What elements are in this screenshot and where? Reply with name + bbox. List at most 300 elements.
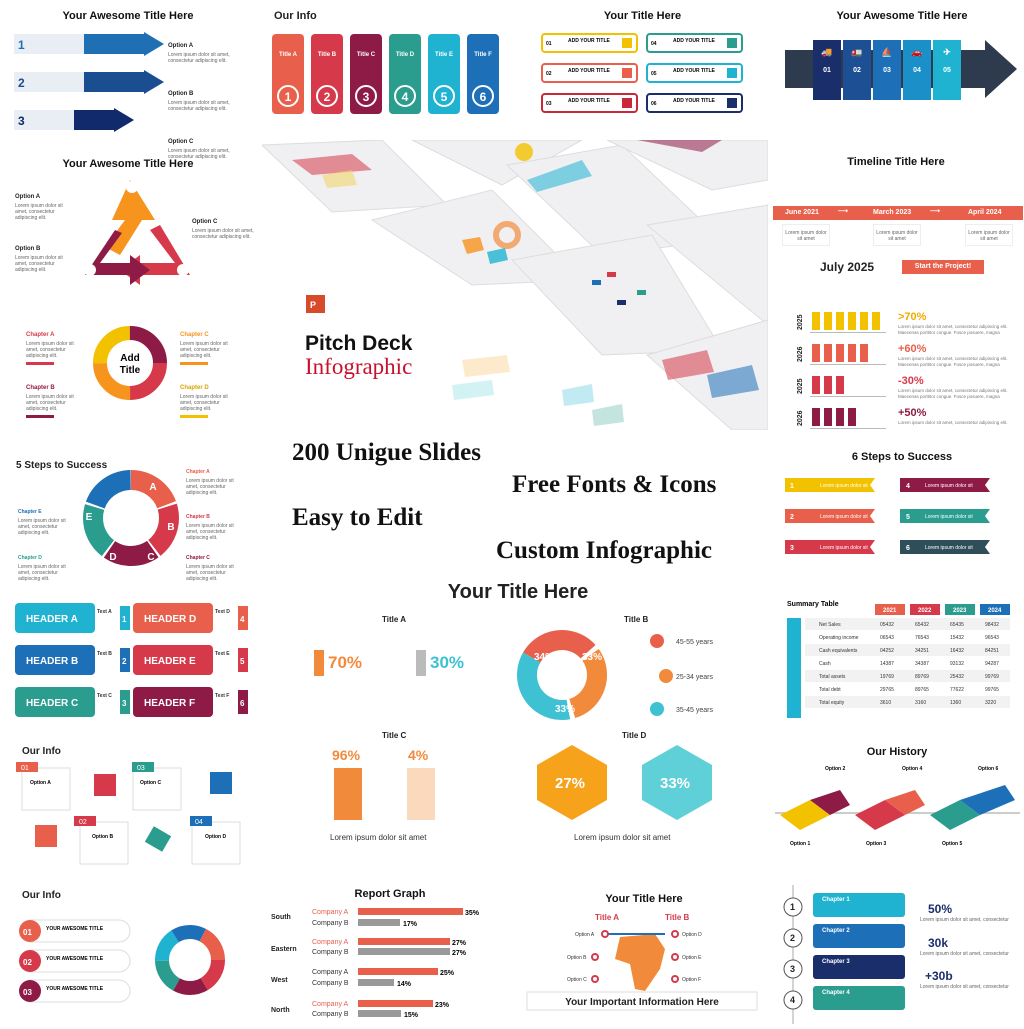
panel: map: Option C [567, 977, 587, 983]
panel: headers: 1 [122, 615, 127, 624]
panel: people chart: Lorem ipsum dolor sit amet, consectetur adipiscing elit. [898, 420, 1008, 425]
big arrow: 03 [883, 67, 891, 74]
panel: 5 steps: Lorem ipsum dolor sit amet, consectetur adipiscing elit. [18, 518, 66, 536]
panel: summary table: 99765 [985, 687, 999, 693]
panel: chapters: Lorem ipsum dolor sit amet, consectetur [920, 917, 1009, 923]
panel: summary table: 25432 [950, 674, 964, 680]
panel: summary table: 76543 [915, 635, 929, 641]
panel: map: Option D [682, 932, 702, 938]
panel: timeline: Lorem ipsum dolor sit amet [876, 230, 918, 242]
panel: headers: HEADER F [144, 698, 195, 709]
panel: chapters: 1 [790, 902, 795, 912]
panel: central title here: 35-45 years [676, 707, 713, 714]
panel: summary table: 34387 [915, 661, 929, 667]
panel: map: Option F [682, 977, 701, 983]
panel: report graph: 15% [404, 1012, 419, 1019]
timeline cards [782, 224, 830, 246]
ribbons: 3 [790, 545, 794, 552]
heading: Your Title Here [605, 893, 683, 905]
panel: summary table: 05432 [880, 622, 894, 628]
panel: add title donut: Lorem ipsum dolor sit amet, consectetur adipiscing elit. [180, 394, 228, 412]
timeline cards: Lorem ipsum dolor sit amet [785, 230, 827, 242]
ring: C [147, 552, 155, 563]
panel: headers: 6 [240, 699, 245, 708]
panel: map: Your Important Information Here [565, 997, 719, 1008]
panel: summary table: 2021 [883, 608, 897, 614]
panel: our history: Option 6 [978, 766, 998, 772]
panel: headers: HEADER E [144, 656, 196, 667]
panel: 5 steps: Lorem ipsum dolor sit amet, consectetur adipiscing elit. [186, 564, 234, 582]
arrow 2: 2 [18, 76, 25, 90]
boxes: ADD YOUR TITLE [673, 68, 716, 74]
ribbons: Lorem ipsum dolor sit [925, 514, 973, 520]
ribbons: Lorem ipsum dolor sit [820, 483, 868, 489]
ribbons: Lorem ipsum dolor sit [925, 545, 973, 551]
chapters: Lorem ipsum dolor sit amet, consectetur adipiscing elit. [26, 341, 74, 359]
panel: chapters: 50% [928, 902, 952, 916]
panel: transport arrow [785, 10, 1017, 100]
panel: our info steps [19, 890, 225, 1002]
columns: 1 [285, 90, 292, 104]
options text: Option C [168, 139, 193, 145]
panel: our history [775, 746, 1020, 847]
boxes: 02 [546, 71, 552, 77]
panel: our info boxes: 04 [195, 819, 203, 826]
panel: headers: Text A [97, 609, 112, 615]
heading: 5 Steps to Success [16, 460, 107, 471]
panel: add title donut: Chapter B [26, 385, 55, 391]
panel: chapters [784, 885, 1009, 1024]
slide mockups: P [310, 300, 316, 310]
panel: add title donut: Chapter D [180, 385, 209, 391]
panel: central title here: 33% [555, 704, 575, 715]
panel: people chart: 2026 [797, 346, 804, 362]
panel: our info boxes: Option C [140, 780, 161, 786]
arrow 2 [14, 70, 164, 94]
panel: report graph: Company A [312, 1001, 349, 1008]
panel: summary table: 84251 [985, 648, 999, 654]
columns: Title D [396, 52, 415, 58]
panel: summary table: 06543 [880, 635, 894, 641]
panel: chapters: Lorem ipsum dolor sit amet, consectetur [920, 984, 1009, 990]
panel: our info boxes: Option D [205, 834, 226, 840]
panel: map: Option B [567, 955, 587, 961]
columns: 3 [363, 90, 370, 104]
panel: summary table: 94287 [985, 661, 999, 667]
ring: E [86, 512, 93, 523]
big arrow: 05 [943, 67, 951, 74]
columns: Title C [357, 52, 376, 58]
options text: Lorem ipsum dolor sit amet, consectetur adipiscing elit. [168, 52, 230, 64]
panel: 6 steps [785, 451, 990, 554]
labels: Lorem ipsum dolor sit amet, consectetur adipiscing elit. [186, 478, 234, 496]
options text: Lorem ipsum dolor sit amet, consectetur adipiscing elit. [168, 148, 230, 160]
ring: B [167, 522, 175, 533]
columns: 4 [402, 90, 409, 104]
options [15, 194, 63, 221]
panel: timeline: April 2024 [968, 209, 1001, 216]
panel: summary table: 1360 [950, 700, 961, 706]
ribbons [785, 478, 990, 554]
big arrow: ⛵ [881, 46, 893, 57]
big arrow: 🚗 [911, 47, 923, 57]
hero title: Pitch Deck [305, 332, 412, 355]
panel: summary table: 98432 [985, 622, 999, 628]
panel: our info steps: YOUR AWESOME TITLE [46, 956, 104, 962]
panel: report graph: Company B [312, 980, 349, 987]
chapters [26, 332, 74, 365]
panel: report graph: North [271, 1007, 290, 1014]
panel: central title here: 25-34 years [676, 674, 713, 681]
panel: people chart: +50% [898, 407, 927, 419]
panel: summary table: 15432 [950, 635, 964, 641]
panel: our info steps: 02 [23, 958, 32, 967]
boxes: ADD YOUR TITLE [568, 98, 611, 104]
options text: Lorem ipsum dolor sit amet, consectetur adipiscing elit. [168, 100, 230, 112]
panel: 5 steps: Chapter E [18, 509, 42, 515]
columns [272, 34, 499, 114]
columns: Title E [435, 52, 453, 58]
panel: our info boxes: Option A [30, 780, 51, 786]
heading: Your Awesome Title Here [62, 10, 194, 22]
panel: summary table: Net Sales [819, 622, 841, 628]
july: July 2025 [820, 260, 874, 274]
ring [83, 470, 179, 566]
panel: central title here: 45-55 years [676, 639, 713, 646]
panel: headers: HEADER B [26, 656, 78, 667]
panel: timeline: March 2023 [873, 209, 911, 216]
panel: central title here: Title D [622, 731, 647, 740]
panel: chapters: Chapter 2 [822, 928, 850, 934]
panel: report graph: 23% [435, 1002, 450, 1009]
big arrow: 🚚 [821, 47, 833, 57]
panel: our info boxes: Option B [92, 834, 113, 840]
panel: our info boxes [16, 746, 240, 864]
panel: report graph: Company B [312, 949, 349, 956]
panel: summary table: Total debt [819, 687, 841, 693]
boxes: 06 [651, 101, 657, 107]
panel: report graph: Company B [312, 920, 349, 927]
options: Option A [15, 194, 40, 200]
panel: central title here: Lorem ipsum dolor sit amet [330, 833, 427, 842]
panel: chapters: 3 [790, 964, 795, 974]
panel: our info steps: 03 [23, 988, 32, 997]
arrow 3: 3 [18, 114, 25, 128]
panel: map [526, 893, 758, 1010]
panel: our info steps: 01 [23, 928, 32, 937]
panel: our info boxes: 01 [21, 765, 29, 772]
ribbons: 4 [906, 483, 910, 490]
panel: summary table: 2022 [918, 608, 932, 614]
arrow 1: 1 [18, 38, 25, 52]
panel: chapters: 2 [790, 933, 795, 943]
panel: cycle triangle [15, 158, 254, 285]
panel: headers: HEADER C [26, 698, 78, 709]
big arrow: 🚛 [851, 47, 863, 57]
panel: headers: Text B [97, 651, 112, 657]
panel: report graph [271, 888, 480, 1019]
panel: 5 steps: Chapter D [18, 555, 42, 561]
panel: central title here: Title B [624, 615, 649, 624]
panel: chapters: 4 [790, 995, 795, 1005]
panel: cycle triangle: Lorem ipsum dolor sit amet, consectetur adipiscing elit. [192, 228, 254, 240]
panel: 5 steps: Lorem ipsum dolor sit amet, consectetur adipiscing elit. [186, 523, 234, 541]
ring: A [149, 482, 157, 493]
ribbons: 5 [906, 514, 910, 521]
panel: people chart: Lorem ipsum dolor sit amet, consectetur adipiscing elit. [898, 356, 1008, 361]
panel: summary table: Total assets [819, 674, 846, 680]
boxes: ADD YOUR TITLE [568, 68, 611, 74]
panel: headers: 4 [240, 615, 245, 624]
big arrow: 02 [853, 67, 861, 74]
panel: 5 steps: Lorem ipsum dolor sit amet, consectetur adipiscing elit. [18, 564, 66, 582]
panel: people chart [797, 311, 1008, 429]
panel: summary table: Cash equivalents [819, 648, 858, 654]
panel: headers: Text C [97, 693, 112, 699]
big arrow: ✈ [943, 47, 951, 57]
panel: our info boxes: 02 [79, 819, 87, 826]
panel: summary table: 93132 [950, 661, 964, 667]
panel: people chart: -30% [898, 375, 924, 387]
panel: headers: Text D [215, 609, 230, 615]
panel: summary table: 04252 [880, 648, 894, 654]
panel: chapters: Chapter 1 [822, 897, 850, 903]
panel: people chart: 2025 [797, 378, 804, 394]
panel: our info boxes: 03 [137, 765, 145, 772]
columns: 6 [480, 90, 487, 104]
options: Lorem ipsum dolor sit amet, consectetur adipiscing elit. [15, 203, 63, 221]
panel: summary table: Total equity [819, 700, 845, 706]
ribbons: 2 [790, 514, 794, 521]
text block: features: 200 Unigue Slides [292, 439, 481, 466]
panel: map: Option E [682, 955, 702, 961]
panel: people chart: Lorem ipsum dolor sit amet, consectetur adipiscing elit. [898, 324, 1008, 329]
panel: report graph: Company A [312, 909, 349, 916]
panel: summary table: 99769 [985, 674, 999, 680]
panel: chapters: Chapter 4 [822, 990, 850, 996]
panel: chapters: 30k [928, 936, 948, 950]
panel: headers: 3 [122, 699, 127, 708]
panel: people chart: >70% [898, 311, 927, 323]
panel: summary table: 77622 [950, 687, 964, 693]
options text: Option B [168, 91, 193, 97]
panel: people chart: 2026 [797, 410, 804, 426]
panel: central title here: 33% [582, 652, 602, 663]
panel: 5 steps: Chapter C [186, 555, 210, 561]
panel: central title here: 4% [408, 747, 429, 763]
panel: central title here: 33% [660, 775, 690, 792]
panel: add title donut: Chapter C [180, 332, 209, 338]
panel: people chart: Maecenas porttitor congue. Fusce posuere, magna [898, 362, 1000, 367]
panel: summary table: 3160 [915, 700, 926, 706]
panel: summary table: 89769 [915, 674, 929, 680]
panel: summary table: 14387 [880, 661, 894, 667]
panel: timeline: Start the Project! [915, 263, 971, 270]
panel: report graph: 27% [452, 950, 467, 957]
heading: Timeline Title Here [847, 156, 945, 168]
columns: Title A [279, 52, 298, 58]
panel: headers: 2 [122, 657, 127, 666]
panel: headers: Text E [215, 651, 230, 657]
panel: summary table: 2024 [988, 608, 1002, 614]
panel: title boxes list [541, 10, 743, 113]
text block: features: Free Fonts & Icons [512, 471, 716, 498]
panel: cycle triangle: Lorem ipsum dolor sit amet, consectetur adipiscing elit. [15, 255, 63, 273]
panel: central title here [314, 581, 713, 842]
panel: report graph: South [271, 914, 291, 921]
big arrow [785, 40, 1017, 100]
heading: Our Info [274, 10, 317, 22]
heading: 6 Steps to Success [852, 451, 952, 463]
panel: central title here: 27% [555, 775, 585, 792]
labels: Chapter A [186, 469, 210, 475]
panel: report graph: Eastern [271, 946, 297, 953]
panel: central title here: 70% [328, 653, 362, 672]
columns: 5 [441, 90, 448, 104]
panel: headers: Text F [215, 693, 229, 699]
panel: headers: 5 [240, 657, 245, 666]
boxes: ADD YOUR TITLE [673, 98, 716, 104]
panel: our history: Option 1 [790, 841, 810, 847]
boxes: 01 [546, 41, 552, 47]
columns: 2 [324, 90, 331, 104]
boxes: 03 [546, 101, 552, 107]
arrow 1 [14, 32, 164, 56]
panel: cycle triangle: Option B [15, 246, 40, 252]
panel: central title here: 96% [332, 747, 361, 763]
panel: summary table: 3220 [985, 700, 996, 706]
panel: arrows options [14, 10, 230, 160]
panel: chapters: Chapter 3 [822, 959, 850, 965]
panel: chapters: +30b [925, 969, 953, 983]
donut: Add [120, 353, 140, 364]
panel: 5 steps: Chapter B [186, 514, 210, 520]
panel: add title donut: Lorem ipsum dolor sit amet, consectetur adipiscing elit. [180, 341, 228, 359]
panel: central title here: Title C [382, 731, 407, 740]
heading: Report Graph [355, 888, 425, 900]
panel: summary table: 34251 [915, 648, 929, 654]
labels [186, 469, 234, 496]
panel: cycle triangle: Option C [192, 219, 217, 225]
panel: summary table: 16432 [950, 648, 964, 654]
heading: Your Awesome Title Here [836, 10, 968, 22]
panel: map: Option A [575, 932, 595, 938]
panel: central title here: Lorem ipsum dolor sit amet [574, 833, 671, 842]
panel: summary table: 29765 [880, 687, 894, 693]
arrow 3 [14, 108, 134, 132]
heading: Our History [867, 746, 927, 758]
options text [168, 42, 230, 160]
panel: timeline: Lorem ipsum dolor sit amet [968, 230, 1010, 242]
panel: report graph: 35% [465, 910, 480, 917]
panel: our info steps: YOUR AWESOME TITLE [46, 926, 104, 932]
big arrow: 04 [913, 67, 921, 74]
panel: headers: HEADER D [144, 614, 196, 625]
panel: summary table: 96543 [985, 635, 999, 641]
heading: Our Info [22, 890, 61, 901]
panel: summary table: Operating income [819, 635, 859, 641]
panel: report graph: 27% [452, 940, 467, 947]
cycle arrows [85, 180, 190, 285]
chapters: Chapter A [26, 332, 54, 338]
panel: timeline: ⟶ [930, 208, 940, 215]
boxes: 04 [651, 41, 657, 47]
boxes [541, 33, 743, 113]
panel: summary table: 65432 [915, 622, 929, 628]
panel: headers [15, 603, 248, 717]
panel: our info steps: YOUR AWESOME TITLE [46, 986, 104, 992]
ribbons: Lorem ipsum dolor sit [820, 514, 868, 520]
panel: people chart: Maecenas porttitor congue. Fusce posuere, magna [898, 394, 1000, 399]
panel: summary table: 2023 [953, 608, 967, 614]
panel: report graph: 14% [397, 981, 412, 988]
panel: our history: Option 4 [902, 766, 922, 772]
panel: summary table: Summary Table [787, 601, 839, 608]
panel: our info columns [272, 10, 499, 114]
text block: features: Custom Infographic [496, 537, 712, 564]
panel: summary table: 19769 [880, 674, 894, 680]
big arrow: 01 [823, 67, 831, 74]
ribbons: 6 [906, 545, 910, 552]
donut: Title [120, 365, 141, 376]
slide mockups [262, 140, 768, 430]
panel: central title here: Title A [382, 615, 406, 624]
panel: report graph: West [271, 977, 288, 984]
panel: map: Title A [595, 913, 619, 922]
panel: people chart: +60% [898, 343, 927, 355]
panel: report graph: Company B [312, 1011, 349, 1018]
panel: timeline [773, 156, 1023, 274]
panel: summary table: 65435 [950, 622, 964, 628]
panel: people chart: 2025 [797, 314, 804, 330]
panel: 5 steps [16, 460, 234, 582]
panel: timeline: June 2021 [785, 209, 819, 216]
boxes: ADD YOUR TITLE [673, 38, 716, 44]
panel: hero image [262, 140, 768, 430]
columns: Title F [474, 52, 492, 58]
options text: Option A [168, 43, 193, 49]
text block: features [292, 439, 716, 564]
donut [93, 326, 167, 400]
columns: Title B [318, 52, 337, 58]
timeline bar [773, 206, 1023, 220]
panel: central title here: 30% [430, 653, 464, 672]
heading: Your Awesome Title Here [62, 158, 194, 170]
ribbons: Lorem ipsum dolor sit [820, 545, 868, 551]
panel: central title here: 34% [534, 652, 554, 663]
panel: timeline: ⟶ [838, 208, 848, 215]
panel: report graph: 17% [403, 921, 418, 928]
panel: our history: Option 2 [825, 766, 845, 772]
text block: features: Easy to Edit [292, 504, 423, 531]
panel: our history: Option 5 [942, 841, 962, 847]
ring: D [109, 552, 117, 563]
panel: people chart: Lorem ipsum dolor sit amet, consectetur adipiscing elit. [898, 388, 1008, 393]
panel: summary table: 89765 [915, 687, 929, 693]
panel: add title donut: Lorem ipsum dolor sit amet, consectetur adipiscing elit. [26, 394, 74, 412]
panel: report graph: Company A [312, 969, 349, 976]
panel: our history: Option 3 [866, 841, 886, 847]
panel: headers: HEADER A [26, 614, 78, 625]
heading: Our Info [22, 746, 61, 757]
panel: hero image: Infographic [305, 354, 412, 379]
panel: add title donut [26, 326, 228, 418]
boxes: ADD YOUR TITLE [568, 38, 611, 44]
panel: summary table [787, 600, 1010, 718]
heading: Your Title Here [448, 581, 588, 603]
panel: report graph: 25% [440, 970, 455, 977]
heading: Your Title Here [604, 10, 681, 22]
